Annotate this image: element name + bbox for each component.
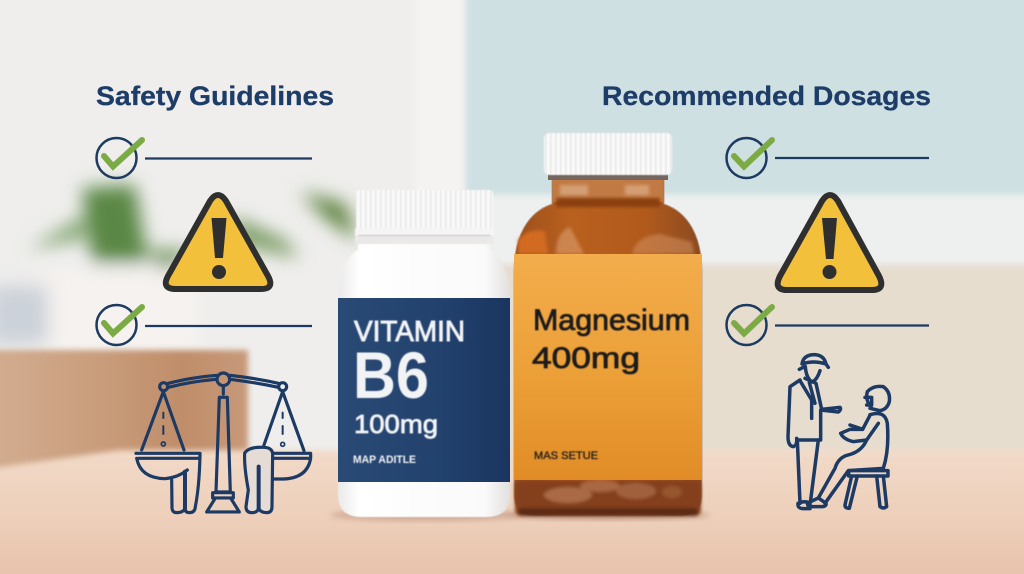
bottle: vitamin B6 <box>330 190 520 521</box>
icon: warning triangle <box>166 195 270 289</box>
label text: B6 <box>353 338 429 412</box>
check item 2 <box>96 305 312 345</box>
check item 1 <box>726 138 929 178</box>
check item 1 <box>96 138 312 178</box>
label text <box>353 316 465 466</box>
icon: warning triangle <box>778 195 881 290</box>
label text <box>532 304 690 462</box>
label text: VITAMIN <box>354 316 465 348</box>
label <box>514 254 702 480</box>
cap <box>355 190 494 244</box>
icon: balance scale <box>136 373 311 513</box>
heading: safety guidelines: Safety Guidelines <box>96 81 334 111</box>
label text: 400mg <box>532 342 640 375</box>
label text: MAS SETUE <box>534 450 598 462</box>
neck and highlights <box>518 174 694 254</box>
bottle body <box>338 243 510 517</box>
check item 2 <box>726 305 929 345</box>
pills <box>515 480 701 516</box>
panel: recommended dosages <box>602 81 931 509</box>
heading: recommended dosages: Recommended Dosages <box>602 81 931 111</box>
label <box>338 298 510 482</box>
panel: safety guidelines <box>96 81 334 513</box>
icon: doctor and seated patient <box>788 355 890 509</box>
label text: MAP ADITLE <box>353 454 416 466</box>
glass body <box>514 178 702 516</box>
label text: 100mg <box>354 409 438 439</box>
bottle: magnesium <box>506 133 710 520</box>
label text: Magnesium <box>533 304 690 337</box>
bottle shadow <box>506 510 710 520</box>
cap <box>544 133 672 175</box>
bottle shadow <box>330 509 520 521</box>
